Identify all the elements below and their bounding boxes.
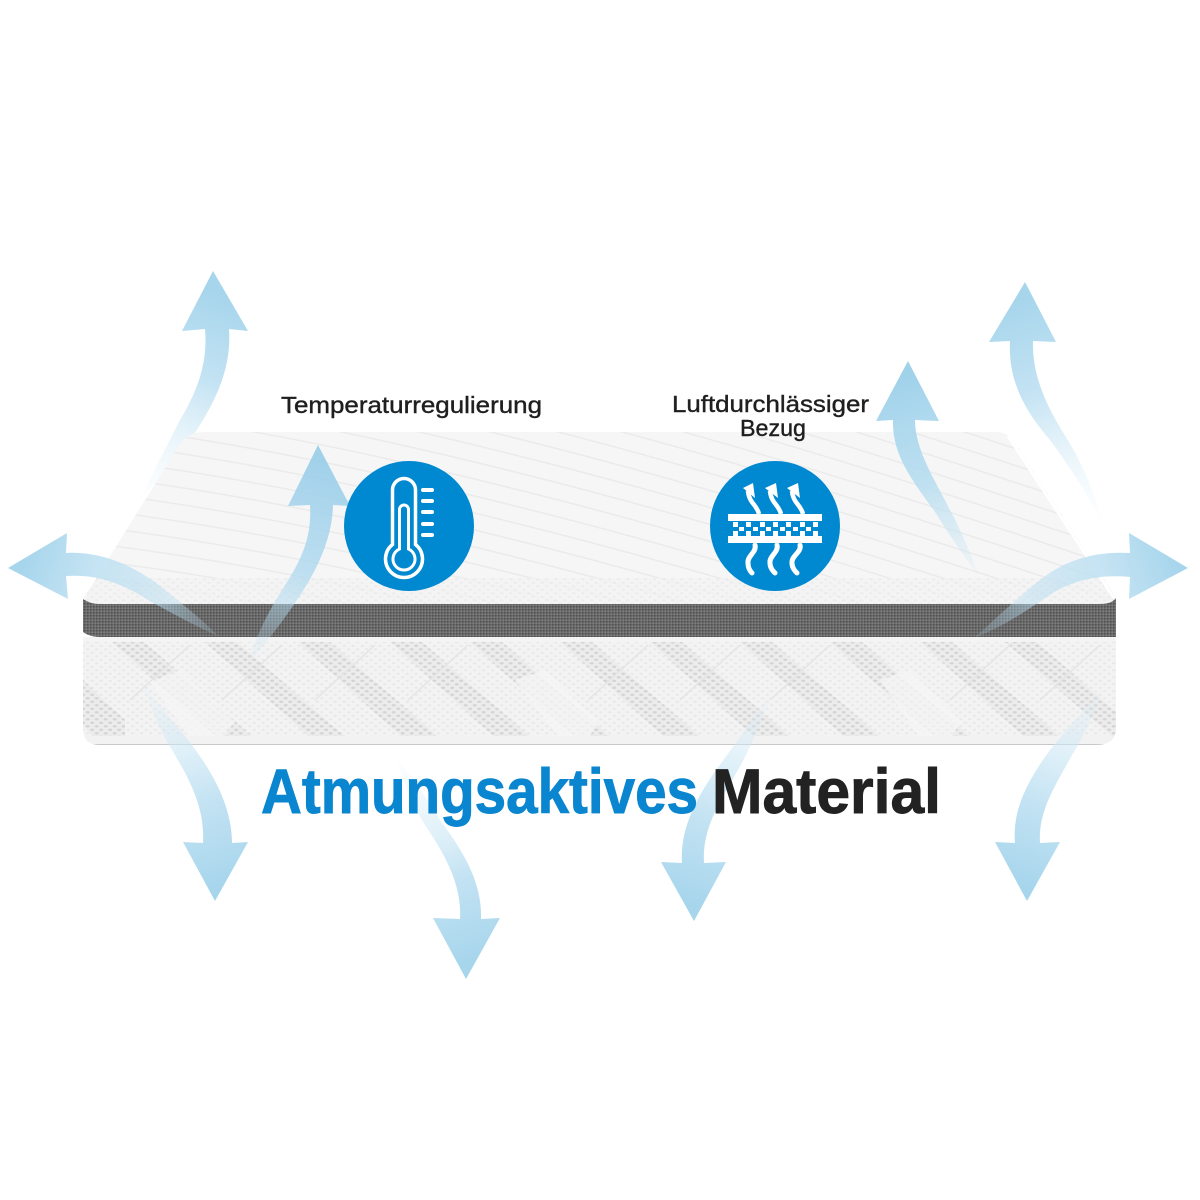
arrow: bottom left bbox=[143, 685, 248, 901]
mattress side quilted panel bbox=[83, 637, 1116, 746]
label: Luftdurchlässiger Bezug: Luftdurchlässiger bbox=[672, 391, 869, 417]
arrow: bottom middle left bbox=[398, 760, 500, 979]
title: Atmungsaktives bbox=[261, 757, 698, 827]
arrow: left bbox=[8, 533, 218, 636]
icon: thermometer bbox=[344, 461, 474, 591]
label: Luftdurchlässiger Bezug bbox=[672, 391, 869, 441]
mattress bbox=[83, 432, 1116, 745]
arrow: top right, behind mattress bbox=[989, 282, 1102, 524]
arrow: inner right bbox=[876, 361, 980, 578]
arrow: inner left bbox=[248, 445, 350, 664]
icon: breathable fabric layers bbox=[710, 461, 840, 591]
arrow: bottom middle right bbox=[661, 692, 772, 921]
mattress grey band bbox=[83, 598, 1116, 637]
label: Temperaturregulierung: Temperaturregulierung bbox=[281, 392, 542, 418]
arrow: top left, behind mattress bbox=[140, 271, 248, 500]
arrow: right bbox=[974, 533, 1188, 638]
arrow: bottom right bbox=[995, 688, 1102, 901]
label: Luftdurchlässiger Bezug: Bezug bbox=[740, 415, 806, 441]
mattress top surface bbox=[84, 432, 1115, 604]
title: Material bbox=[712, 757, 941, 827]
